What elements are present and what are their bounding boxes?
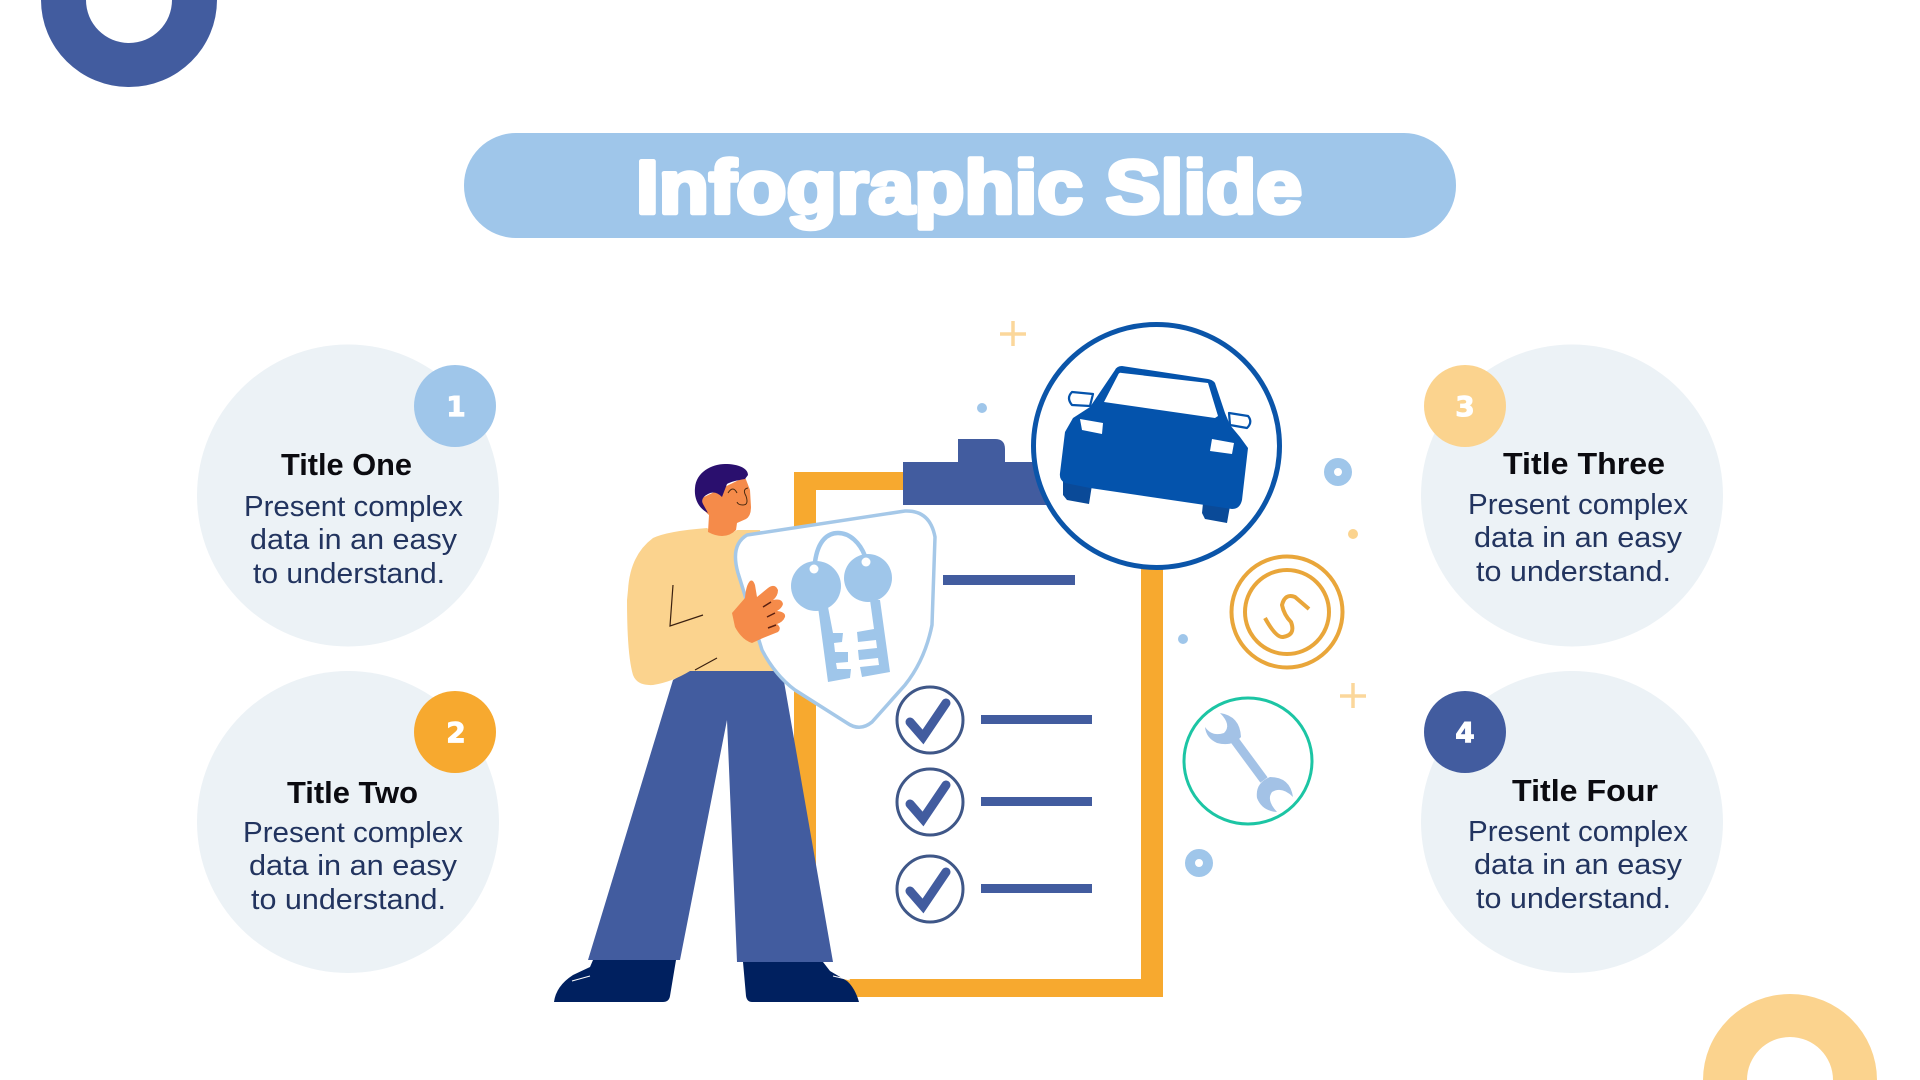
text block: title one: to understand. — [253, 558, 445, 590]
title banner — [464, 133, 1456, 238]
checklist item 1 — [897, 687, 1092, 753]
text block: title one — [244, 491, 463, 590]
panel: title four — [1421, 671, 1723, 973]
decorative sparkles — [977, 321, 1366, 872]
pants — [588, 670, 833, 962]
text block: title four: data in an easy — [1474, 849, 1683, 881]
badge 1: 1 — [446, 390, 466, 423]
badge 1 — [414, 365, 496, 447]
clipboard clip — [903, 439, 1100, 505]
title: Infographic Slide — [636, 145, 1302, 229]
heading: title three: Title Three — [1503, 446, 1665, 481]
badge 3 — [1424, 365, 1506, 447]
sweater — [627, 528, 790, 685]
badge 2 — [414, 691, 496, 773]
badge 2: 2 — [446, 716, 466, 749]
shoes — [554, 960, 859, 1002]
decorative donut: top left — [41, 0, 217, 87]
text block: title four — [1468, 816, 1688, 915]
text block: title four: to understand. — [1476, 883, 1671, 915]
icon: coin — [1232, 556, 1342, 668]
panel: title one — [197, 344, 499, 646]
text block: title three: Present complex — [1468, 489, 1688, 521]
clipboard header line — [943, 575, 1075, 585]
heading: title four: Title Four — [1512, 773, 1658, 808]
illustration: person — [554, 464, 859, 1002]
text block: title three — [1468, 489, 1688, 588]
heading: title one: Title One — [281, 447, 412, 482]
sweater creases — [670, 585, 717, 670]
illustration: clipboard checklist — [794, 439, 1163, 997]
checklist item 3 — [897, 856, 1092, 922]
hand — [732, 580, 785, 643]
text block: title three: to understand. — [1476, 556, 1671, 588]
keys — [791, 533, 892, 682]
icon: wrench — [1184, 698, 1312, 824]
head — [695, 464, 751, 536]
car — [1060, 366, 1250, 523]
text block: title one: Present complex — [244, 491, 463, 523]
decorative donut: bottom right — [1703, 994, 1877, 1080]
panel: title three — [1421, 344, 1723, 646]
badge 4 — [1424, 691, 1506, 773]
panel: title two — [197, 671, 499, 973]
icon: car badge — [1034, 324, 1280, 568]
text block: title two — [243, 817, 463, 916]
badge 4: 4 — [1455, 716, 1475, 749]
text block: title two: data in an easy — [249, 850, 458, 882]
text block: title two: to understand. — [251, 884, 446, 916]
text block: title one: data in an easy — [250, 524, 458, 556]
text block: title four: Present complex — [1468, 816, 1688, 848]
heading: title two: Title Two — [287, 775, 418, 810]
icon: shield with keys — [735, 511, 935, 727]
text block: title three: data in an easy — [1474, 522, 1683, 554]
checklist item 2 — [897, 769, 1092, 835]
text block: title two: Present complex — [243, 817, 463, 849]
badge 3: 3 — [1455, 390, 1475, 423]
